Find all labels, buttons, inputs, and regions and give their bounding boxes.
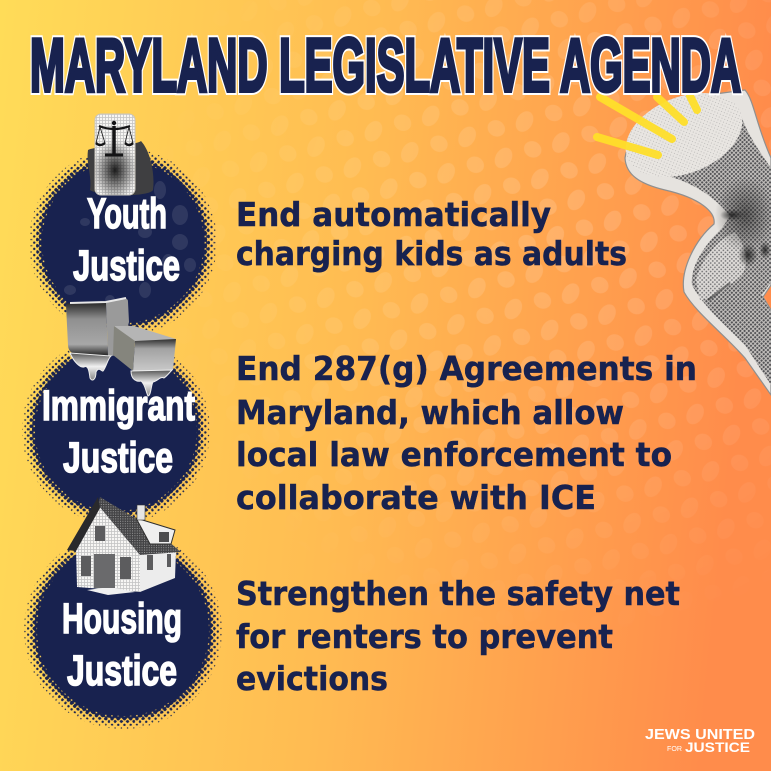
text block: housing justice agenda: evictions — [236, 659, 388, 698]
text block: immigrant justice agenda: Maryland, which allow — [236, 393, 624, 432]
left cube side — [106, 298, 129, 356]
label: Youth Justice — [73, 190, 180, 290]
text block: youth justice agenda — [236, 195, 627, 273]
icon: house — [67, 497, 181, 595]
text block: housing justice agenda: Strengthen the safety net — [236, 574, 680, 613]
text block: housing justice agenda — [236, 574, 680, 698]
logo: Jews United for Justice: JEWS UNITED — [645, 726, 755, 743]
right cube top — [114, 326, 176, 342]
label: Housing Justice: Housing — [62, 595, 182, 643]
label: Housing Justice — [62, 595, 182, 695]
steps — [87, 587, 135, 595]
megaphone illustration — [597, 77, 771, 395]
background halftone blobs — [251, 0, 771, 547]
yellow sound lines — [597, 96, 697, 155]
label: Housing Justice: Justice — [67, 647, 177, 695]
left cube drips — [70, 353, 111, 380]
megaphone bell — [613, 77, 755, 193]
megaphone paper cutout — [625, 90, 771, 395]
megaphone body — [668, 118, 771, 385]
side wall — [138, 551, 176, 592]
text block: immigrant justice agenda: collaborate with ICE — [236, 478, 596, 517]
logo: Jews United for Justice: FOR — [667, 746, 682, 753]
label: Youth Justice: Youth — [87, 190, 167, 238]
left cube front — [66, 303, 108, 356]
right roof — [98, 497, 181, 555]
icon: hand holding scales card — [88, 114, 154, 195]
card — [95, 114, 135, 195]
left cube highlight — [70, 298, 126, 303]
label: Immigrant Justice: Immigrant — [42, 382, 195, 430]
right cube drips — [131, 370, 172, 396]
text block: youth justice agenda: End automatically — [236, 195, 551, 234]
hand fingers — [696, 232, 746, 300]
panel: youth justice circle — [29, 148, 217, 336]
label: Immigrant Justice: Justice — [63, 434, 173, 482]
front wall — [76, 505, 140, 592]
chimney — [137, 505, 145, 520]
hand knuckle line — [708, 283, 730, 300]
text block: housing justice agenda: for renters to prevent — [236, 617, 613, 656]
label: Immigrant Justice — [42, 382, 195, 482]
hand silhouette — [88, 141, 154, 195]
right cube front — [133, 339, 176, 371]
panel: housing justice circle — [24, 531, 222, 729]
text block: youth justice agenda: charging kids as adults — [236, 234, 627, 273]
right cube side — [113, 326, 135, 371]
logo: Jews United for Justice — [645, 726, 755, 755]
hand shadows — [715, 177, 771, 253]
door — [94, 554, 115, 588]
left roof edge — [67, 497, 100, 551]
logo: Jews United for Justice: JUSTICE — [685, 739, 750, 755]
text block: immigrant justice agenda — [236, 349, 697, 517]
text block: immigrant justice agenda: local law enforcement to — [236, 435, 672, 474]
windows — [81, 526, 171, 579]
icon: melting ice cubes — [66, 298, 176, 396]
dormer — [136, 518, 175, 544]
text block: immigrant justice agenda: End 287(g) Agreements in — [236, 349, 697, 388]
panel: immigrant justice circle — [22, 336, 210, 524]
scales of justice — [96, 126, 133, 155]
label: Youth Justice: Justice — [73, 242, 180, 290]
